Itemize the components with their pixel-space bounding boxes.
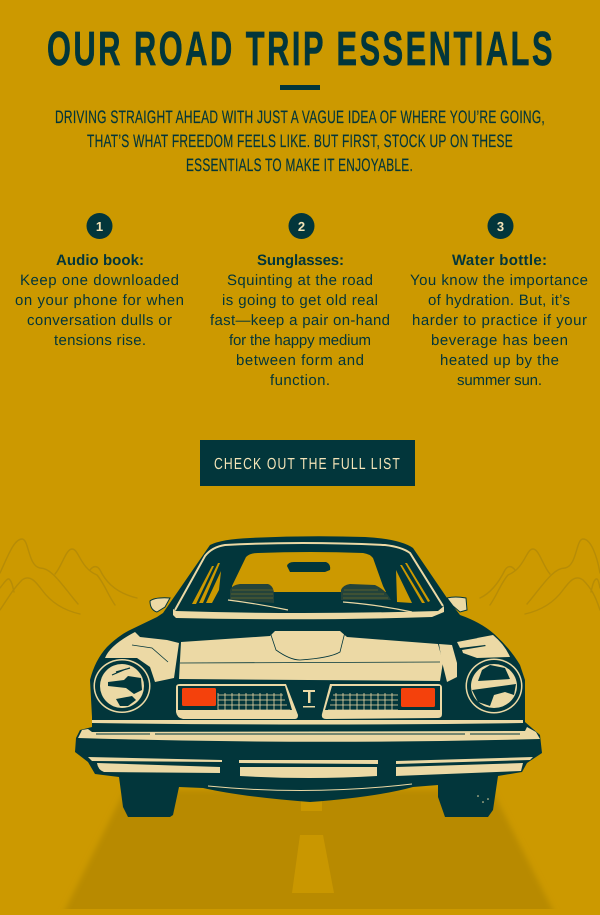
left side mirror [150, 598, 170, 612]
essential 2: sunglasses: for the happy medium [229, 332, 371, 349]
right grille [322, 684, 442, 719]
windshield frame [175, 543, 443, 610]
essential 2: sunglasses: 2 [298, 219, 305, 234]
mountains right [480, 539, 600, 614]
button: check out the full list [200, 440, 415, 486]
essential 3: water bottle: harder to practice if your [412, 312, 587, 329]
seats [230, 584, 391, 603]
wipers [228, 600, 412, 612]
button: check out the full list: CHECK OUT THE FULL LIST [214, 456, 401, 473]
right headlight [466, 658, 522, 714]
left side window [192, 563, 221, 604]
left grille [176, 684, 298, 719]
essential 2: sunglasses: Squinting at the road [227, 272, 373, 289]
essential 2: sunglasses [210, 213, 390, 389]
right side mirror [447, 597, 467, 612]
essential 3: water bottle: Water bottle: [452, 252, 547, 269]
essential 3: water bottle: summer sun. [457, 372, 542, 389]
bumper lower chrome [88, 757, 533, 778]
essential 3: water bottle: heated up by the [440, 352, 559, 369]
essential 1: audio book: conversation dulls or [27, 312, 172, 329]
essential 1: audio book: on your phone for when [15, 292, 184, 309]
essential 1: audio book: Audio book: [56, 252, 144, 269]
right fender [439, 635, 510, 682]
car [75, 536, 542, 817]
intro text [55, 107, 545, 175]
essential 1: audio book: tensions rise. [54, 332, 146, 349]
bumper guard line [208, 784, 412, 791]
essential 1: audio book: Keep one downloaded [20, 272, 179, 289]
car body silhouette [75, 536, 542, 817]
lower windshield trim [173, 606, 444, 619]
essential 3: water bottle: of hydration. But, it’s [428, 292, 570, 309]
right side window [396, 563, 430, 603]
T badge [303, 690, 315, 708]
road dashes [292, 800, 334, 893]
mountains left [0, 539, 137, 614]
essential 1: audio book [15, 213, 184, 349]
essential 3: water bottle [410, 213, 588, 389]
essential 3: water bottle: You know the importance [410, 272, 588, 289]
hood lines [180, 632, 440, 663]
left fender [105, 632, 179, 682]
essential 2: sunglasses: fast—keep a pair on-hand [210, 312, 390, 329]
windshield glass [232, 552, 386, 592]
left headlight [94, 659, 150, 713]
essential 1: audio book: 1 [96, 219, 103, 234]
essential 2: sunglasses: function. [270, 372, 330, 389]
essential 2: sunglasses: is going to get old real [222, 292, 378, 309]
essential 2: sunglasses: between form and [236, 352, 364, 369]
essential 3: water bottle: beverage has been [431, 332, 568, 349]
hood lip [92, 720, 523, 724]
rear-view mirror [287, 562, 330, 572]
hood [179, 631, 443, 681]
tire highlight [477, 795, 489, 803]
bumper top chrome [78, 727, 540, 742]
intro text: ESSENTIALS TO MAKE IT ENJOYABLE. [186, 155, 413, 175]
essential 2: sunglasses: Sunglasses: [257, 252, 344, 269]
title divider [280, 85, 320, 90]
essential 3: water bottle: 3 [497, 219, 504, 234]
road [60, 790, 558, 915]
